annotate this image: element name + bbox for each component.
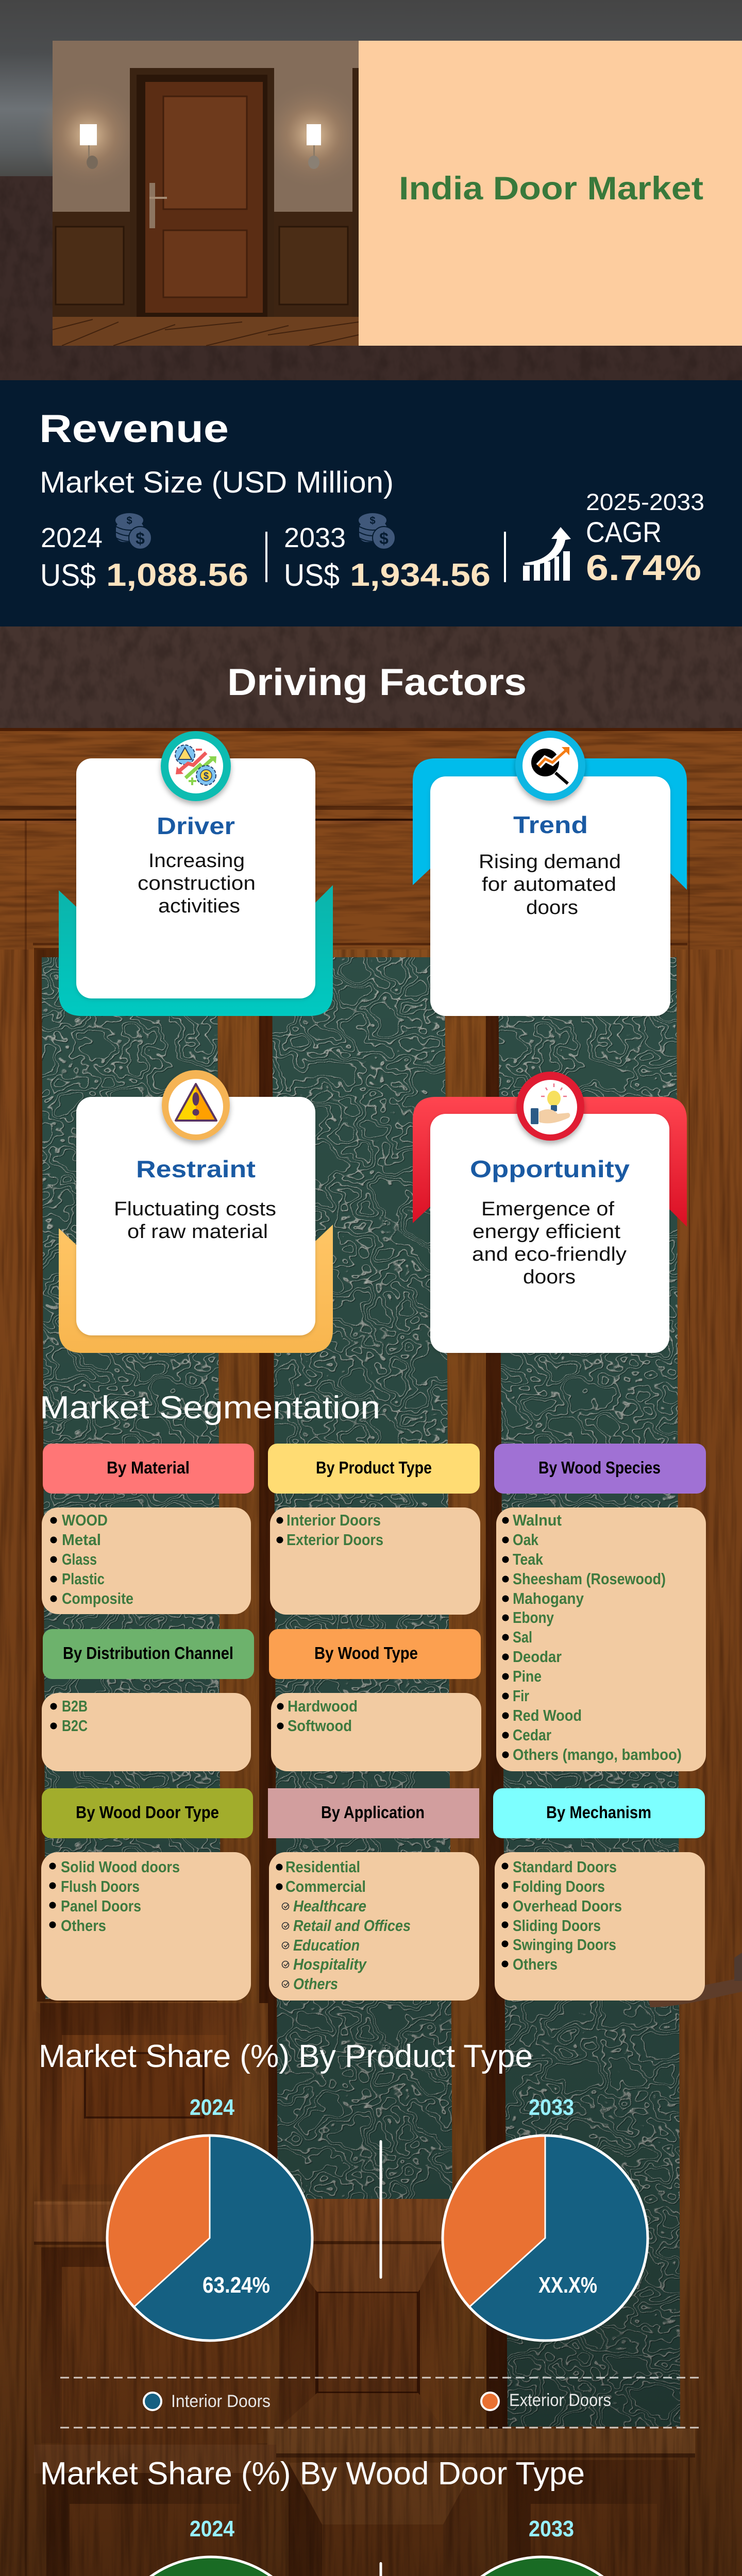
segment: by wood species: Cedar (513, 1726, 551, 1744)
panel: driver (59, 731, 333, 1016)
segment: by wood type: Softwood (288, 1717, 352, 1735)
segment: by distribution channel: B2C (62, 1717, 88, 1735)
segment: by material: Plastic (62, 1570, 105, 1588)
text: driver description: construction (138, 873, 256, 894)
value: CAGR: CAGR (586, 516, 662, 548)
segment: by wood species: Oak (513, 1531, 539, 1549)
segment: by wood species: Sheesham (Rosewood) (513, 1570, 666, 1588)
segment: by distribution channel (42, 1629, 254, 1771)
segment: by wood species: Red Wood (513, 1706, 582, 1724)
text: market size: Market Size (USD Million) (40, 466, 394, 499)
segment: by product type: Exterior Doors (286, 1531, 383, 1549)
panel: restraint (59, 1070, 333, 1353)
segment: by application: Residential (285, 1858, 360, 1876)
segment: by product type: By Product Type (316, 1458, 432, 1477)
text: restraint description: Fluctuating costs (114, 1198, 276, 1220)
segment: by application: Healthcare (293, 1897, 366, 1915)
segment: by application: By Application (321, 1803, 425, 1822)
segment: by wood species: By Wood Species (538, 1458, 661, 1477)
chart: product type 2024: 63.24% (203, 2273, 270, 2298)
value: CAGR (586, 489, 704, 588)
text: driver description: activities (158, 895, 240, 917)
legend: product type: Exterior Doors (509, 2391, 611, 2410)
segment: by mechanism: Swinging Doors (513, 1936, 616, 1954)
text: trend description: for automated (482, 874, 616, 895)
icon: trend (515, 731, 585, 801)
segment: by material: Glass (62, 1550, 97, 1568)
icon: opportunity (516, 1072, 584, 1141)
segment: by wood type: By Wood Type (314, 1643, 418, 1663)
heading: driving factors: Driving Factors (227, 662, 527, 703)
segment: by material: By Material (107, 1458, 190, 1477)
chart: wood door type 2033 (440, 2516, 645, 2576)
segment: by application: Commercial (285, 1877, 366, 1895)
segment: by mechanism: By Mechanism (546, 1803, 651, 1822)
value: 2024 revenue: 1,088.56 (106, 557, 248, 593)
segment: by product type: Interior Doors (286, 1511, 381, 1529)
icon: driver (161, 731, 231, 801)
segment: by material: Composite (62, 1589, 133, 1607)
title: restraint: Restraint (136, 1156, 256, 1182)
title panel: India Door Market (399, 171, 703, 207)
background: wall behind the header (0, 0, 742, 728)
segment: by wood species: Pine (513, 1667, 542, 1685)
panel: revenue (0, 380, 742, 626)
segment: by material: Metal (62, 1531, 101, 1549)
icon: driver: $ (204, 771, 209, 781)
icon: coins 2024: $ (136, 529, 145, 548)
segment: by application: Hospitality (293, 1955, 367, 1973)
segment: by mechanism: Folding Doors (513, 1877, 605, 1895)
text: opportunity description (472, 1198, 627, 1288)
segment: by distribution channel: By Distribution Channel (63, 1643, 233, 1663)
icon: coins 2033: $ (369, 515, 376, 527)
text: opportunity description: doors (523, 1266, 576, 1288)
legend: product type: Interior Doors (171, 2392, 271, 2411)
segment: by application (268, 1788, 479, 2001)
value: 2024 revenue (40, 557, 248, 593)
heading: market share by product type: Market Share (%) By Product Type (39, 2039, 533, 2074)
segment: by wood species: Fir (513, 1687, 529, 1705)
value: 2033 revenue (284, 557, 491, 593)
segment: by wood species: Mahogany (513, 1589, 584, 1607)
segment: by wood door type: Panel Doors (61, 1897, 141, 1915)
segment: by wood door type: Solid Wood doors (61, 1858, 180, 1876)
title panel (359, 41, 742, 346)
text: opportunity description: energy efficient (473, 1221, 620, 1243)
chart: product type 2033: 2033 (529, 2095, 574, 2120)
segment: by mechanism: Sliding Doors (513, 1917, 601, 1935)
chart: product type 2024: 2024 (190, 2095, 234, 2120)
chart: wood door type 2024 (108, 2516, 314, 2576)
heading: revenue: Revenue (39, 407, 229, 451)
text: opportunity description: and eco-friendly (472, 1244, 627, 1265)
panel: opportunity (413, 1072, 687, 1353)
segment: by wood species: Deodar (513, 1648, 562, 1666)
segment: by wood door type: By Wood Door Type (76, 1803, 219, 1822)
text: trend description: doors (526, 897, 578, 919)
segment: by material (42, 1444, 254, 1614)
text: driver description: Increasing (148, 850, 245, 872)
segment: by wood species: Walnut (513, 1511, 562, 1529)
heading: market segmentation: Market Segmentation (40, 1390, 380, 1426)
segment: by application: Others (293, 1975, 338, 1993)
value: 2024 revenue: US$ (40, 558, 96, 592)
segment: by wood species (494, 1444, 706, 1771)
segment: by distribution channel: B2B (62, 1697, 88, 1715)
segment: by wood door type (41, 1788, 253, 2001)
segment: by wood type (269, 1629, 481, 1771)
text: trend description: Rising demand (479, 851, 621, 873)
chart: wood door type 2024: 2024 (190, 2516, 234, 2541)
segment: by wood type: Hardwood (288, 1697, 358, 1715)
value: 2033 revenue: US$ (284, 558, 340, 592)
icon: coins 2033 (359, 513, 395, 549)
icon: growth arrow (523, 527, 571, 581)
segment: by wood species: Others (mango, bamboo) (513, 1745, 682, 1764)
text: 2033: 2033 (284, 522, 346, 553)
legend: product type (144, 2391, 611, 2411)
value: 2033 revenue: 1,934.56 (350, 557, 491, 593)
segment: by mechanism: Others (513, 1955, 558, 1973)
panel: trend (413, 731, 687, 1016)
icon: coins 2024 (115, 513, 151, 549)
background: wood door (0, 728, 742, 2576)
title: trend: Trend (513, 811, 588, 838)
value: CAGR: 2025-2033 (586, 489, 704, 515)
chart: wood door type 2033: 2033 (529, 2516, 574, 2541)
hero photo: wooden door with wall lamps (35, 41, 367, 346)
segment: by product type (268, 1444, 480, 1615)
chart: product type 2033: XX.X% (538, 2273, 597, 2298)
chart: product type 2033 (443, 2095, 648, 2341)
icon: coins 2024: $ (126, 515, 132, 527)
text: 2024: 2024 (41, 522, 103, 553)
segment: by application: Retail and Offices (293, 1917, 411, 1935)
segment: by wood species: Teak (513, 1550, 544, 1568)
icon: restraint (162, 1070, 230, 1140)
chart: product type 2024 (107, 2095, 312, 2341)
value: CAGR: 6.74% (586, 548, 701, 588)
heading: market share by wood door type: Market Share (%) By Wood Door Type (40, 2456, 585, 2492)
segment: by wood door type: Others (61, 1917, 106, 1935)
segment: by wood species: Ebony (513, 1608, 554, 1626)
segment: by mechanism (493, 1788, 705, 2001)
text: restraint description (114, 1198, 276, 1243)
segment: by mechanism: Standard Doors (513, 1858, 617, 1876)
title: opportunity: Opportunity (470, 1156, 630, 1182)
segment: by wood species: Sal (513, 1628, 532, 1646)
segment: by application: Education (293, 1936, 360, 1954)
segment: by wood door type: Flush Doors (61, 1877, 140, 1895)
segment: by mechanism: Overhead Doors (513, 1897, 622, 1915)
text: driver description (138, 850, 256, 917)
text: restraint description: of raw material (127, 1221, 268, 1243)
title: driver: Driver (157, 812, 235, 839)
segment: by material: WOOD (62, 1511, 108, 1529)
text: trend description (479, 851, 621, 919)
icon: coins 2033: $ (379, 529, 389, 548)
text: opportunity description: Emergence of (481, 1198, 614, 1220)
